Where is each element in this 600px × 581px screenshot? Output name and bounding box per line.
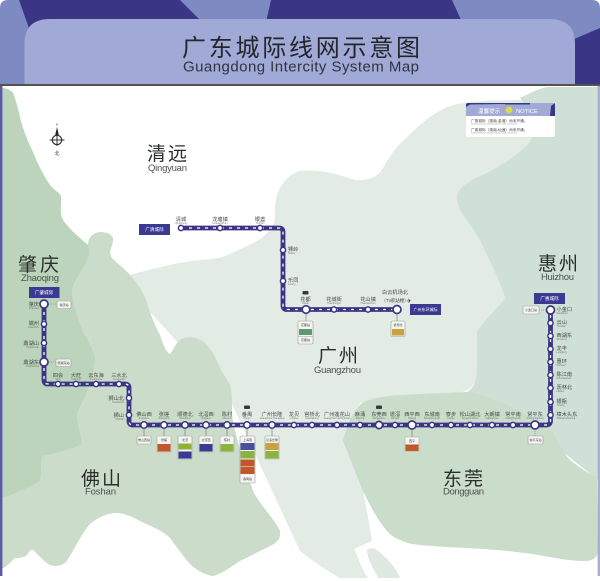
line tag: Guangqing intercity: 广清城际	[145, 226, 164, 233]
station labels: top row: 陈村	[222, 410, 232, 418]
station labels: top row: 西平西	[404, 411, 420, 418]
transfer box: Huadu	[298, 321, 313, 344]
transfer box: Xiaojinkou: 小金口站	[525, 307, 537, 312]
station labels: top row: Dawang	[72, 378, 81, 381]
station labels: left side: 肇庆	[29, 300, 39, 308]
region: Huizhou	[457, 87, 598, 480]
station labels: top row: Yundonghai	[90, 378, 103, 381]
notice box: 广惠城际（惠南-仙速）尚未开通。	[471, 127, 528, 132]
station labels: top row: Longbei	[290, 417, 299, 420]
transfer box: Foshan West	[137, 436, 151, 444]
region label: Dongguan	[443, 468, 484, 498]
station labels: top row: 花都	[300, 295, 311, 303]
station labels: right side: Yinping	[556, 404, 565, 407]
station labels: top row: 麻涌	[355, 410, 365, 418]
right map border	[598, 85, 600, 576]
transfer box: Airport North: 机场北	[393, 322, 403, 327]
region: Guangzhou south island	[367, 548, 400, 578]
region label: Foshan: 佛山	[81, 468, 121, 490]
region: Dongguan	[343, 392, 598, 561]
station labels: top row: Zhangcha	[159, 417, 170, 420]
station labels: Shiling and Letong: Shiling	[288, 252, 296, 255]
icon: train Panyu	[244, 406, 250, 409]
station labels: top row: Shundebei	[179, 417, 191, 420]
station labels: top row	[53, 215, 544, 420]
region label: Zhaoqing: Zhaoqing	[21, 273, 59, 284]
transfer box: Dinghu East: 鼎湖东站	[57, 360, 70, 365]
station labels: left side: 端州	[29, 319, 39, 327]
notice box	[466, 103, 555, 137]
icon: train Huadu	[302, 291, 308, 294]
station labels: top row: Sihui	[55, 378, 61, 381]
notice box: NOTICE	[516, 109, 538, 115]
station labels: top row: 常平南	[505, 410, 521, 418]
icon: airplane: ✈	[406, 298, 412, 305]
line tag: Guanghui intercity: 广惠城际	[540, 295, 559, 302]
transfer box: Beijiao West: 北滘西	[201, 437, 211, 442]
transfer box: Shunde North	[178, 436, 192, 459]
station labels: top row: 寮步	[446, 410, 456, 418]
station labels: right side: 西湖东	[556, 331, 572, 339]
station labels: left side: Zhaoqing	[29, 307, 40, 310]
station labels: top row: 东莞西	[371, 410, 387, 418]
station labels: left side: Dinghudong	[26, 365, 40, 368]
station labels: top row: 四会	[53, 371, 63, 379]
transfer box: Chencun: 陈村	[224, 437, 230, 442]
station labels: top row: 花城街	[326, 295, 342, 303]
transfer box: Guangzhou Changlong: 汉溪长隆	[266, 437, 278, 442]
station labels: Shiling and Letong: Letong	[288, 283, 296, 286]
station labels: left side: Dinghushan	[26, 346, 40, 349]
transfer box: Panyu: 番禺站	[243, 476, 252, 481]
station labels: right side: Chenjiangnan	[556, 377, 572, 380]
station labels: top row: 龙贝	[289, 410, 299, 418]
region label: Dongguan: 东莞	[443, 468, 483, 490]
station labels: top row: Panyu	[244, 417, 251, 420]
station labels: top row: Xipingxi	[408, 417, 417, 420]
station labels: top row: Longtangzhen	[212, 222, 228, 225]
station labels: right side: 樟木头东	[556, 410, 577, 418]
station labels: top row: 官桥北	[304, 410, 321, 418]
station labels: left side: Shishan	[115, 418, 125, 421]
station labels: top row: （T3航站楼）	[381, 297, 409, 304]
notice box: Huizhou-Shenzhen Intercity Railway is under construction	[471, 122, 517, 126]
station labels: left side	[23, 300, 125, 421]
station labels: top row: Sanshuibei	[113, 378, 125, 381]
station labels: top row: Mayong	[356, 417, 365, 420]
station labels: left side: 狮山	[114, 411, 124, 419]
line tag: Guangqing intercity	[139, 224, 170, 235]
rail line: Guangzhao and Guanhui	[44, 304, 550, 425]
station labels: top row: 东城南	[424, 410, 440, 418]
station labels: top row: 番禺	[242, 411, 252, 418]
title english: Guangdong Intercity System Map	[183, 58, 419, 76]
station labels: top row: Huashanzhen	[361, 302, 376, 305]
station labels: top row: Changpingdong	[527, 417, 544, 420]
line tag: Guangzhao intercity	[29, 287, 60, 298]
line tag: Guangzhao intercity: 广肇城际	[35, 289, 54, 296]
transfer box: Huadu: 花都站	[301, 337, 310, 342]
region: Foshan	[2, 232, 280, 576]
compass: N	[56, 122, 58, 126]
station labels: top row: 广州长隆	[262, 410, 283, 418]
transfer box: Zhaoqing	[57, 301, 71, 308]
transfer box: Zhaoqing: 肇庆站	[59, 302, 69, 307]
region: Zhaoqing	[2, 88, 95, 498]
station labels: top row: 龙塘镇	[212, 215, 228, 223]
station labels: top row: Changpingnan	[505, 417, 521, 420]
region label: Qingyuan	[147, 143, 187, 174]
transfer box: Shunde North: 北滘	[182, 437, 188, 442]
station labels: right side: 沥林北	[556, 383, 573, 391]
station labels: top row: Yinzhan	[256, 222, 265, 225]
station labels: top row: 花山镇	[360, 295, 376, 303]
transfer box: Airport North	[391, 321, 405, 336]
transfer box: Zhangcha: 张槎	[161, 437, 167, 442]
station labels: top row: 松山湖北	[460, 410, 481, 418]
station labels: top row: Songshanhubei	[462, 417, 479, 420]
line tag: Guangzhou east ring: 广州东环城际	[414, 306, 438, 312]
region label: Qingyuan: Qingyuan	[148, 163, 187, 174]
transfer box: Zhangcha	[157, 436, 171, 452]
station labels: top row: 顺德北	[177, 410, 194, 418]
station labels: right side: Zhangmutoudong	[556, 417, 576, 420]
station labels: top row: Guangzhou Lianhuashan	[324, 417, 351, 420]
region label: Foshan: Foshan	[85, 486, 116, 498]
station labels: right side: Lilinbei	[556, 390, 564, 393]
region: Guangzhou	[130, 100, 560, 578]
transfer stems	[49, 304, 546, 437]
region label: Huizhou: Huizhou	[541, 272, 574, 283]
station labels: top row: Huadu	[302, 302, 310, 305]
station labels: right side: Xiaojinkou	[556, 312, 568, 315]
station labels: top row: 大朗镇	[484, 410, 500, 418]
transfer box: Chencun	[220, 436, 234, 452]
station labels: Shiling and Letong: 乐同	[288, 277, 298, 284]
station labels: top row: Dongguanxi	[373, 417, 386, 420]
station labels: right side: 云山	[556, 318, 567, 326]
compass	[50, 122, 64, 157]
station labels: top row: 广州莲花山	[324, 410, 350, 418]
station labels: top row: Guanqiaobei	[305, 417, 319, 420]
transfer box: Panyu: 上海南	[243, 437, 252, 442]
region label: Dongguan: Dongguan	[443, 486, 484, 498]
station labels: top row: Foshanxi	[139, 417, 149, 420]
station labels: top row: 云东海	[88, 371, 104, 379]
icon: train Dongguanxi	[376, 406, 382, 409]
station labels: top row: 白云机场北	[382, 288, 409, 296]
station labels: top row: Guangzhou Changlong	[260, 417, 285, 420]
title chinese: 广东城际线网示意图	[182, 35, 420, 62]
station labels: top row: 三水北	[111, 371, 128, 379]
rail line: Guangqing and east ring	[181, 228, 397, 310]
station labels: top row: 张槎	[159, 410, 169, 418]
transfer box: Guangzhou Changlong	[265, 436, 279, 459]
station labels: right side: Huihuan	[556, 364, 566, 367]
station labels: top row: Dalangzhen	[486, 417, 499, 420]
station labels: top row: 常平东	[527, 410, 543, 418]
station labels: top row: Qingcheng	[175, 222, 187, 225]
transfer box: Panyu	[240, 436, 255, 483]
transfer box: Huadu: 花都站	[301, 322, 310, 327]
compass: 北	[54, 150, 60, 157]
station labels: top row: 大旺	[71, 371, 81, 379]
transfer box: Changping East: 常平东站	[529, 437, 542, 442]
transfer box: Dinghu East	[56, 359, 71, 366]
region label: Huizhou: 惠州	[538, 253, 578, 275]
station labels: right side	[556, 305, 577, 420]
region label: Qingyuan: 清远	[147, 143, 187, 165]
station labels: top row: 北滘西	[198, 410, 214, 418]
station labels: left side: Shishanbei	[112, 401, 124, 404]
station labels: top row: 道滘	[390, 410, 400, 418]
station labels: left side: 鼎湖山	[23, 339, 39, 347]
station labels: left side: Duanzhou	[28, 326, 40, 329]
station labels: top row: 清城	[176, 215, 187, 223]
station labels: top row: Chencun	[222, 417, 232, 420]
transfer box: Xiping West: 西平	[409, 439, 415, 443]
line tag: Guanghui intercity	[534, 293, 565, 304]
station labels: left side: 鼎湖东	[23, 358, 39, 366]
left map border	[0, 85, 2, 576]
station labels: top row: 银盏	[255, 215, 265, 223]
notice box: Huizhou-Shenzhen Intercity Railway is under construction	[471, 132, 517, 134]
transfer box: Xiaojinkou	[523, 306, 539, 314]
stations on main line	[40, 225, 554, 429]
region label: Guangzhou	[314, 345, 361, 376]
station labels: right side: Yunshan	[556, 325, 566, 328]
station labels: top row: Daojiao	[391, 417, 400, 420]
notice box: 温馨提示	[478, 107, 501, 115]
station labels: top row: Huachengjie	[327, 302, 341, 305]
station labels: right side: Xihudong	[556, 338, 567, 341]
region label: Guangzhou: 广州	[318, 345, 358, 367]
region label: Guangzhou: Guangzhou	[314, 365, 361, 376]
station labels: top row: Liaobu	[447, 417, 455, 420]
station labels: right side: 小金口	[556, 305, 572, 313]
header banner	[0, 0, 600, 86]
station labels: left side: 狮山北	[108, 394, 125, 402]
station labels: right side: 龙丰	[556, 344, 567, 352]
transfer box: Changping East	[528, 436, 543, 444]
station labels: top row: Beijiaoxi	[202, 417, 211, 420]
transfer box: Foshan West: 佛山西站	[138, 437, 150, 442]
station labels: right side: 银瓶	[556, 397, 567, 405]
station labels: top row: Dongchengnan	[424, 417, 441, 420]
station labels: Shiling and Letong: 狮岭	[288, 245, 298, 253]
transfer box: Xiping West	[405, 437, 419, 452]
line tag: Guangzhou east ring	[410, 304, 441, 315]
station labels: right side: 惠环	[556, 357, 567, 365]
station labels: right side: Longfeng	[556, 351, 567, 354]
station labels: right side: 陈江南	[556, 370, 572, 378]
station labels: Shiling and Letong	[288, 245, 298, 286]
transfer box: Beijiao West	[199, 436, 213, 452]
notice box: 广惠城际（惠南-金港）尚未开通。	[471, 118, 528, 123]
region label: Zhaoqing: 肇庆	[18, 254, 59, 276]
station labels: top row: 佛山西	[136, 410, 152, 418]
